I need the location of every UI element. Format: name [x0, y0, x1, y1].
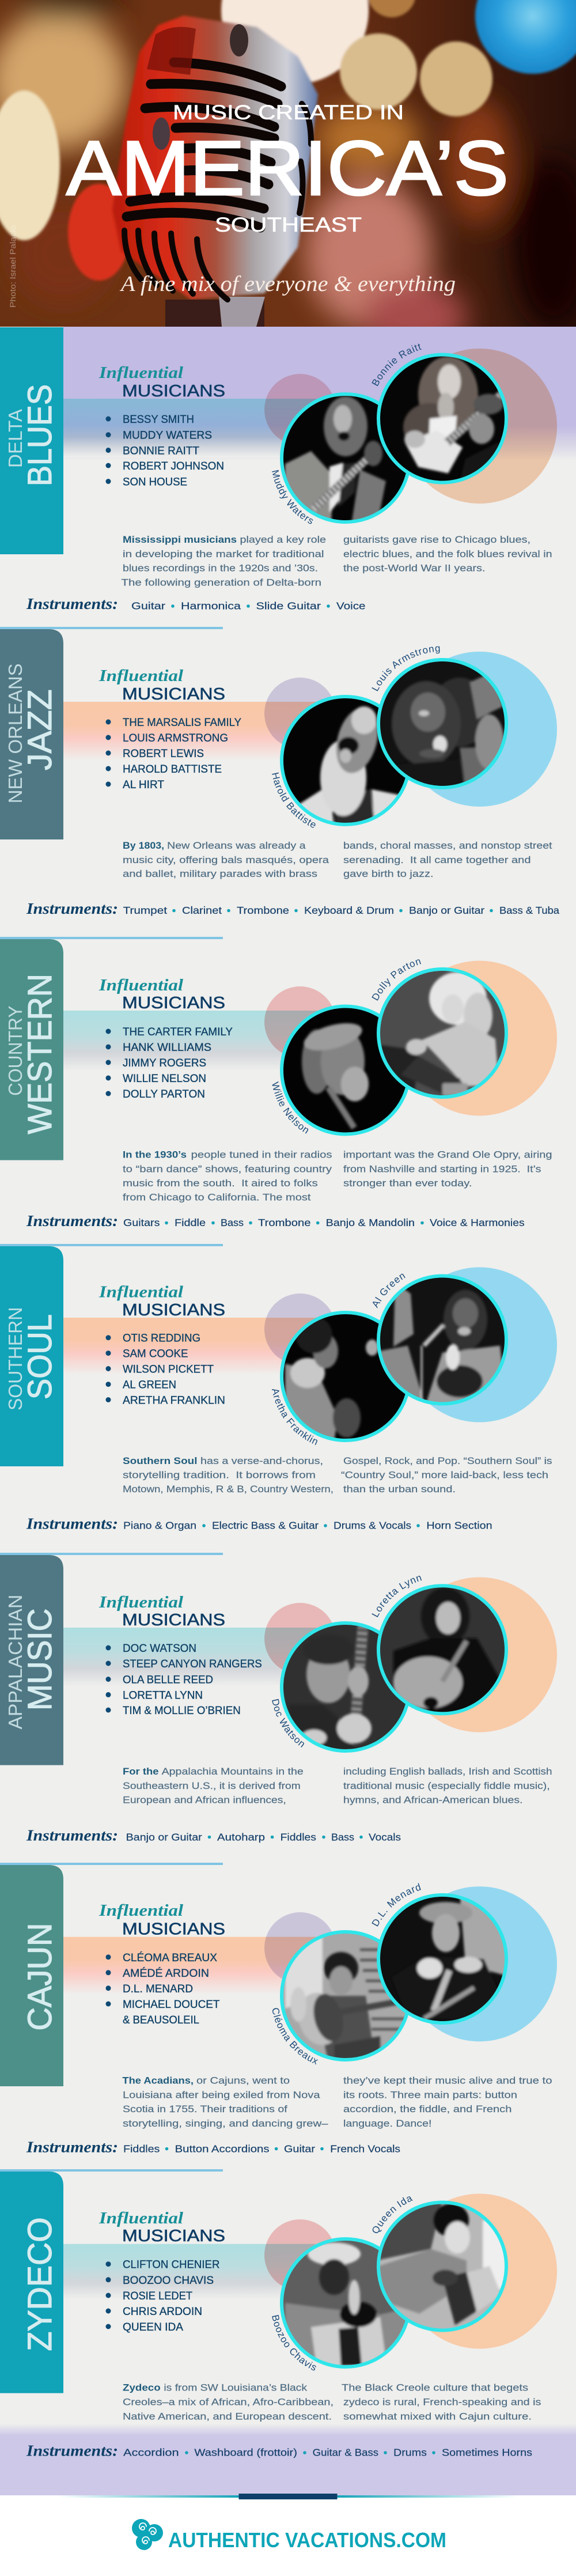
musician list [106, 1642, 262, 1717]
footer gradient rule [58, 2495, 518, 2498]
description: people tuned in their radios [191, 1150, 332, 1160]
description [121, 535, 552, 588]
description: By 1803, [123, 841, 164, 851]
photo: Louis Armstrong [378, 660, 507, 790]
heading [98, 2209, 225, 2245]
accent circle small [264, 2219, 336, 2291]
instruments row: Voice [336, 600, 365, 611]
logo wordmark: AUTHENTIC VACATIONS.COM [168, 2528, 446, 2552]
description: electric blues, and the folk blues revival in [343, 549, 552, 559]
description: the post-World War II years. [343, 563, 485, 574]
description: Southern Soul [123, 1456, 197, 1466]
description: Scotia in 1755. Their traditions of [123, 2104, 287, 2114]
caption: Dolly Parton: Dolly Parton [372, 959, 421, 1001]
caption: Boozoo Chavis: Boozoo Chavis [272, 2315, 316, 2370]
sidebar: CAJUN [21, 1923, 59, 2030]
musician list: SAM COOKE [123, 1348, 188, 1360]
sidebar: JAZZ [21, 689, 59, 770]
instruments row: Banjo or Guitar [126, 1831, 202, 1843]
panel: southern soul [0, 1246, 557, 1533]
heading: Influential [98, 976, 184, 994]
sidebar: WESTERN [21, 974, 59, 1134]
instruments row: Guitars [123, 1217, 160, 1228]
instruments row: Electric Bass & Guitar [212, 1520, 319, 1531]
description: Louisiana after being exiled from Nova [123, 2090, 320, 2100]
photo: Willie Nelson [282, 1006, 410, 1134]
white footer background [0, 2495, 576, 2576]
photo: Dolly Parton [376, 969, 506, 1099]
sidebar: SOUTHERN [5, 1307, 26, 1410]
description: Native American, and European descent. [123, 2412, 332, 2422]
musician list: CHRIS ARDOIN [123, 2305, 202, 2318]
sidebar [0, 1246, 63, 1466]
musician list: ROBERT JOHNSON [123, 460, 224, 472]
heading [98, 1901, 225, 1938]
sidebar: COUNTRY [5, 1005, 26, 1096]
description: storytelling, singing, and dancing grew– [123, 2119, 329, 2129]
section divider [0, 1244, 223, 1246]
heading: MUSICIANS [122, 994, 225, 1012]
musician list [106, 413, 224, 489]
instruments row: Instruments: [26, 900, 118, 917]
musician list: CLÉOMA BREAUX [123, 1951, 217, 1964]
section divider [0, 2169, 223, 2172]
sidebar: ZYDECO [21, 2217, 59, 2351]
instruments row: Bass [221, 1217, 244, 1228]
accent circle small [264, 1603, 336, 1674]
heading: MUSICIANS [122, 2227, 225, 2245]
instruments row: Sometimes Horns [442, 2447, 532, 2458]
musician list: & BEAUSOLEIL [123, 2014, 199, 2026]
musician list [106, 1332, 225, 1407]
section divider [0, 1863, 223, 1865]
instruments row: Voice & Harmonies [430, 1217, 525, 1228]
panel: zydeco [0, 2172, 576, 2495]
musician list: OTIS REDDING [123, 1332, 200, 1345]
instruments row: Banjo or Guitar [409, 905, 484, 916]
musician list: MUDDY WATERS [123, 429, 212, 442]
title: music created in: MUSIC CREATED IN [173, 101, 404, 124]
musician list: HAROLD BATTISTE [123, 763, 222, 776]
caption: Louis Armstrong: Louis Armstrong [372, 646, 440, 691]
description: music city, offering bals masqués, opera [123, 855, 329, 865]
heading: Influential [98, 667, 184, 685]
sidebar: DELTA [5, 409, 26, 468]
photo: Doc Watson [282, 1623, 410, 1753]
instruments row [26, 900, 559, 917]
description: including English ballads, Irish and Scottish [343, 1766, 552, 1777]
musician list: LOUIS ARMSTRONG [123, 732, 228, 744]
description: Southeastern U.S., it is derived from [123, 1781, 301, 1791]
sidebar [0, 2172, 63, 2393]
instruments row [26, 2138, 400, 2155]
instruments row: Keyboard & Drum [304, 905, 394, 916]
panel: country western [0, 939, 557, 1230]
description: The Acadians, [122, 2076, 194, 2086]
instruments row: Trombone [237, 905, 289, 916]
caption: D.L. Menard: D.L. Menard [372, 1883, 421, 1927]
sidebar: BLUES [21, 384, 59, 486]
musician list: WILLIE NELSON [123, 1072, 206, 1085]
instruments row: Button Accordions [175, 2143, 270, 2154]
caption: Muddy Waters: Muddy Waters [272, 470, 313, 524]
photo: Al Green [378, 1276, 507, 1406]
instruments row: Clarinet [182, 905, 222, 916]
photo: Boozoo Chavis [282, 2239, 410, 2369]
description: has a verse-and-chorus, [200, 1456, 323, 1466]
musician list: MICHAEL DOUCET [123, 1998, 219, 2011]
instruments row: Instruments: [26, 2442, 118, 2460]
hero panel [0, 0, 576, 351]
description: to “barn dance” shows, featuring country [123, 1164, 332, 1174]
description: For the [123, 1766, 159, 1777]
heading: MUSICIANS [122, 1301, 225, 1319]
accent circle large [402, 652, 557, 807]
photo: Cléoma Breaux [282, 1932, 410, 2062]
instruments row: Guitar [284, 2143, 315, 2154]
sidebar [0, 1865, 63, 2086]
musician list: QUEEN IDA [123, 2321, 183, 2333]
description: played a key role [240, 535, 326, 545]
musician list: WILSON PICKETT [123, 1363, 214, 1376]
heading [98, 1593, 225, 1629]
description: and ballet, military parades with brass [123, 869, 317, 879]
description: somewhat mixed with Cajun culture. [343, 2412, 532, 2422]
accent circle small [264, 678, 336, 749]
heading: MUSICIANS [122, 1611, 225, 1629]
description: zydeco is rural, French-speaking and is [343, 2397, 541, 2408]
description: The Black Creole culture that begets [342, 2383, 528, 2393]
photo: Bonnie Raitt [378, 355, 506, 483]
sidebar [0, 1555, 63, 1765]
instruments row: Bass & Tuba [499, 905, 559, 916]
footer dark bar [238, 2494, 338, 2499]
description: storytelling tradition. It borrows from [123, 1470, 316, 1481]
instruments row: Fiddle [175, 1217, 206, 1228]
description [123, 841, 552, 879]
caption: Willie Nelson: Willie Nelson [272, 1081, 309, 1134]
instruments row: Trumpet [123, 905, 167, 916]
musician list: CLIFTON CHENIER [123, 2259, 219, 2271]
musician list: SON HOUSE [123, 476, 187, 489]
musician list: ROSIE LEDET [123, 2290, 192, 2302]
section divider [0, 1553, 223, 1555]
section divider [0, 937, 223, 939]
description: is from SW Louisiana’s Black [164, 2383, 308, 2393]
instruments row: Banjo & Mandolin [326, 1217, 415, 1228]
description: gave birth to jazz. [343, 869, 433, 879]
musician list: TIM & MOLLIE O’BRIEN [123, 1704, 241, 1717]
musician list: THE CARTER FAMILY [123, 1026, 233, 1038]
heading: MUSICIANS [122, 1920, 225, 1938]
instruments row: Accordion [123, 2447, 179, 2458]
heading [98, 976, 225, 1012]
accent circle small [264, 986, 336, 1058]
panel: delta blues [0, 327, 576, 612]
description: guitarists gave rise to Chicago blues, [343, 535, 530, 545]
description: language. Dance! [343, 2119, 431, 2129]
musician list: LORETTA LYNN [123, 1689, 203, 1701]
instruments row: Drums [393, 2447, 427, 2458]
instruments row: Drums & Vocals [334, 1520, 411, 1531]
heading: Influential [98, 1283, 184, 1301]
title: southeast: SOUTHEAST [215, 214, 362, 236]
caption: Bonnie Raitt: Bonnie Raitt [372, 343, 422, 386]
instruments row: Vocals [369, 1831, 401, 1843]
heading: Influential [98, 1901, 184, 1920]
heading: Influential [98, 1593, 184, 1612]
description: blues recordings in the 1920s and ’30s. [123, 563, 318, 574]
description: Motown, Memphis, R & B, Country Western, [123, 1484, 334, 1495]
description: hymns, and African-American blues. [343, 1795, 523, 1806]
accent circle large [402, 1886, 557, 2041]
photo: D.L. Menard [378, 1893, 509, 2023]
description: European and African influences, [123, 1795, 286, 1806]
instruments row: Instruments: [26, 1212, 118, 1230]
purple backdrop [63, 327, 576, 461]
caption: Doc Watson: Doc Watson [272, 1699, 304, 1747]
instruments row [26, 595, 366, 612]
description: New Orleans was already a [167, 841, 306, 851]
musician list: OLA BELLE REED [123, 1673, 213, 1686]
gradient band [63, 1937, 346, 1995]
description: they’ve kept their music alive and true to [343, 2076, 552, 2086]
instruments row [26, 1826, 401, 1844]
gradient band [63, 702, 346, 761]
instruments row: French Vocals [330, 2143, 400, 2154]
musician list: STEEP CANYON RANGERS [123, 1658, 262, 1670]
heading [98, 1283, 225, 1319]
instruments row: Piano & Organ [123, 1520, 196, 1531]
photo: Aretha Franklin [282, 1312, 410, 1443]
accent circle small [264, 1912, 336, 1984]
instruments row: Guitar [131, 600, 165, 611]
description [123, 2383, 541, 2422]
instruments row: Bass [331, 1831, 354, 1843]
instruments row: Autoharp [217, 1831, 265, 1843]
description: music from the south. It aired to folks [123, 1178, 318, 1189]
photo: Harold Battiste [282, 697, 410, 827]
description: than the urban sound. [343, 1484, 456, 1495]
photo: Muddy Waters [282, 394, 410, 524]
musician list: DOLLY PARTON [123, 1088, 205, 1100]
instruments row: Trombone [258, 1217, 311, 1228]
gradient band [63, 1011, 346, 1071]
description: accordion, the fiddle, and French [343, 2104, 511, 2114]
description: The following generation of Delta-born [121, 577, 321, 588]
musician list: ROBERT LEWIS [123, 747, 204, 760]
musician list: AL GREEN [123, 1379, 176, 1391]
photo: Loretta Lynn [378, 1586, 506, 1716]
musician list: D.L. MENARD [123, 1983, 193, 1995]
footer purple band [0, 2435, 576, 2495]
caption: Aretha Franklin: Aretha Franklin [272, 1389, 317, 1445]
heading: MUSICIANS [122, 685, 225, 703]
description: Zydeco [123, 2383, 161, 2393]
panel: cajun [0, 1865, 557, 2155]
description: Appalachia Mountains in the [162, 1766, 304, 1777]
caption: Al Green: Al Green [373, 1273, 406, 1308]
musician list [106, 1026, 233, 1100]
description: or Cajuns, went to [196, 2076, 290, 2086]
caption: Harold Battiste: Harold Battiste [272, 772, 316, 828]
description [123, 1456, 552, 1495]
instruments row [26, 1212, 525, 1230]
sidebar [0, 327, 63, 554]
accent circle large [402, 2194, 557, 2348]
accent circle large [402, 349, 557, 504]
caption: Cléoma Breaux: Cléoma Breaux [272, 2008, 318, 2065]
description [123, 1150, 552, 1203]
heading [98, 364, 225, 400]
musician list [106, 1951, 219, 2026]
instruments row: Washboard (frottoir) [194, 2447, 297, 2458]
microphone [112, 16, 318, 327]
instruments row [26, 2442, 532, 2460]
description: Gospel, Rock, and Pop. “Southern Soul” is [343, 1456, 552, 1466]
instruments row: Instruments: [26, 595, 118, 612]
sidebar: MUSIC [21, 1609, 59, 1711]
section divider [0, 627, 223, 629]
description [123, 1766, 552, 1806]
instruments row: Guitar & Bass [313, 2447, 378, 2458]
instruments row: Fiddles [123, 2143, 160, 2154]
sidebar [0, 629, 63, 839]
musician list: DOC WATSON [123, 1642, 196, 1655]
description: Creoles–a mix of African, Afro-Caribbean, [123, 2397, 334, 2408]
description: traditional music (especially fiddle music), [343, 1781, 550, 1791]
heading: MUSICIANS [122, 382, 225, 400]
sidebar: NEW ORLEANS [5, 663, 26, 803]
description [122, 2076, 552, 2129]
musician list: BONNIE RAITT [123, 444, 199, 457]
musician list: BESSY SMITH [123, 413, 194, 426]
icon: authentic vacations logo [132, 2519, 163, 2550]
description: in developing the market for traditional [123, 549, 324, 559]
description: bands, choral masses, and nonstop street [343, 841, 552, 851]
accent circle small [264, 1293, 336, 1365]
caption: Loretta Lynn: Loretta Lynn [372, 1576, 422, 1617]
description: serenading. It all came together and [343, 855, 531, 865]
musician list: THE MARSALIS FAMILY [123, 716, 241, 729]
footer fade [0, 2424, 576, 2435]
description: from Nashville and starting in 1925. It’s [343, 1164, 541, 1174]
hero photo: bokeh background [0, 0, 576, 351]
accent circle large [402, 1268, 557, 1422]
gradient band [63, 2244, 346, 2299]
musician list: ARETHA FRANKLIN [123, 1394, 225, 1407]
gradient band [63, 1318, 346, 1375]
gradient band [63, 1628, 346, 1686]
instruments row: Fiddles [281, 1831, 316, 1843]
musician list: JIMMY ROGERS [123, 1057, 206, 1069]
instruments row: Harmonica [181, 600, 241, 611]
musician list: AMÉDÉ ARDOIN [123, 1966, 209, 1980]
title: america's: AMERICA’S [66, 126, 509, 211]
heading: Influential [98, 364, 184, 382]
sidebar [0, 939, 63, 1160]
description: important was the Grand Ole Opry, airing [343, 1150, 552, 1160]
musician list [106, 716, 241, 791]
accent circle large [402, 961, 557, 1115]
sidebar: SOUL [21, 1314, 59, 1399]
instruments row: Instruments: [26, 1826, 118, 1844]
description: stronger than ever today. [343, 1178, 472, 1189]
description: Mississippi musicians [123, 535, 237, 545]
heading [98, 667, 225, 703]
musician list: HANK WILLIAMS [123, 1041, 211, 1054]
panel: new orleans jazz [0, 629, 560, 917]
gradient band [63, 399, 346, 457]
tagline: A fine mix of everyone & everything [119, 272, 456, 296]
description: its roots. Three main parts: button [343, 2090, 517, 2100]
musician list [106, 2259, 219, 2333]
panel: appalachian music [0, 1555, 557, 1844]
instruments row: Instruments: [26, 1515, 118, 1533]
accent circle large [402, 1578, 557, 1732]
description: In the 1930’s [123, 1150, 187, 1160]
sidebar: APPALACHIAN [5, 1595, 26, 1730]
instruments row: Slide Guitar [256, 600, 321, 611]
instruments row: Instruments: [26, 2138, 118, 2155]
musician list: BOOZOO CHAVIS [123, 2274, 214, 2287]
footer [0, 2494, 576, 2576]
description: “Country Soul,” more laid-back, less tech [341, 1470, 548, 1481]
caption: Queen Ida: Queen Ida [372, 2196, 413, 2233]
instruments row: Horn Section [426, 1520, 492, 1531]
description: from Chicago to California. The most [123, 1193, 311, 1203]
photo: Queen Ida [376, 2200, 509, 2330]
accent circle small [264, 374, 336, 445]
heading: Influential [98, 2209, 184, 2227]
instruments row [26, 1515, 492, 1533]
musician list: AL HIRT [123, 778, 164, 791]
photo credit: Photo: Israel Palacio [8, 225, 17, 308]
